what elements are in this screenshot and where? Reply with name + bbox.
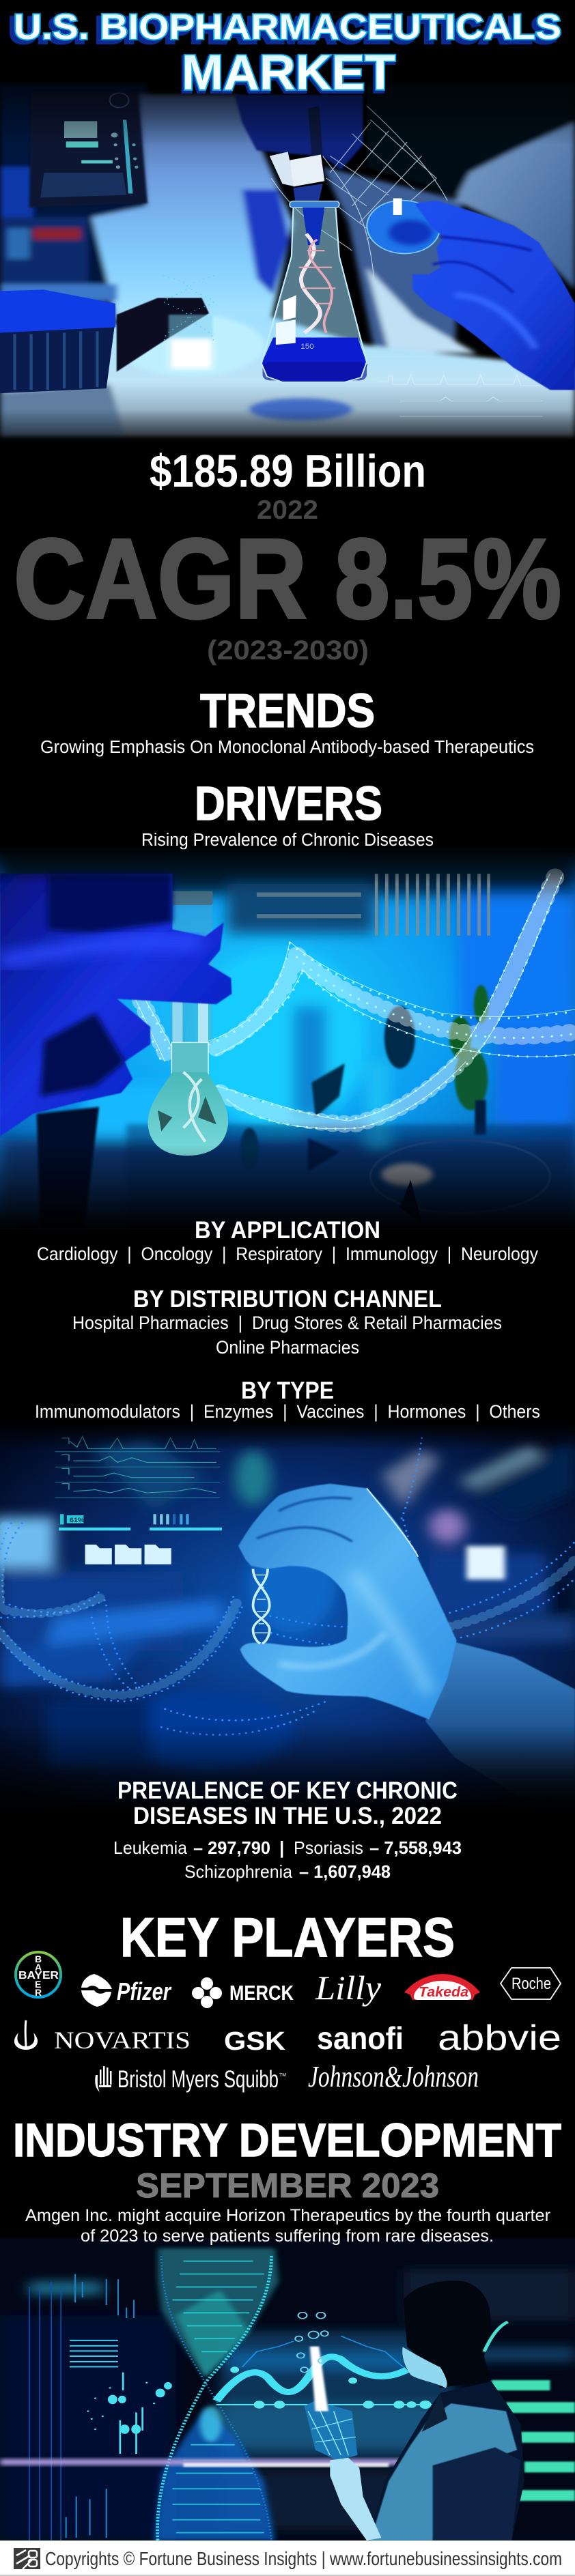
logo: takeda: Takeda [419,1985,468,2000]
hud people stats [59,1514,222,1530]
photo: gloved hand holding dna strand in lab [0,1422,575,1812]
heading: by distribution channel: BY DISTRIBUTION CHANNEL [133,1286,442,1313]
logo: johnson and johnson: Johnson&Johnson [308,2060,479,2093]
photo: gloved hand holding flask with molecular mesh [0,849,575,1229]
leukemia: – 297,790 [193,1837,270,1858]
logo: bristol myers squibb: Bristol Myers Squibb [117,2066,279,2093]
logo: sanofi: sanofi [317,2020,404,2056]
logo: pfizer: Pfizer [117,1977,172,2005]
ecg lines on table [378,375,543,416]
green data bars [492,2380,575,2501]
top fade [0,50,575,145]
photo: scientist with holographic dna [0,2238,575,2541]
blue gloved hand [412,201,575,390]
bottom fade [0,1145,575,1229]
logo: bayer: E [35,1979,41,1990]
logo: bristol myers squibb: TM [279,2073,286,2078]
prevalence figures [113,1837,462,1882]
leukemia: Leukemia [113,1837,188,1858]
title shadow [10,11,557,102]
lab coat sleeve [425,1642,575,1801]
hud dots [87,2373,172,2454]
development text: Amgen Inc. might acquire Horizon Therapeutics by the fourth quarter [25,2206,550,2225]
separator: | [279,1837,284,1858]
scientist silhouette [330,2280,524,2541]
beaker [126,1124,575,1229]
icon: fortune business insights logo [14,2548,40,2569]
flask graduation: 150 [300,343,314,351]
holographic hand [295,2313,358,2460]
flask bulb with dna [148,1042,228,1156]
development text: of 2023 to serve patients suffering from rare diseases. [81,2227,494,2246]
logo: bayer: A [35,1962,42,1973]
horizontal light streak [0,2459,404,2467]
hud people stats: 61% [70,1517,85,1524]
drivers text: Rising Prevalence of Chronic Diseases [141,831,434,850]
logo: roche: Roche [511,1975,551,1993]
trends text: Growing Emphasis On Monoclonal Antibody-based Therapeutics [40,738,534,757]
cagr period: (2023-2030) [207,635,369,666]
psoriasis: – 7,558,943 [369,1837,462,1858]
logo: roche [501,1968,561,1999]
top black band [0,0,575,51]
glass tube [169,891,212,1044]
flask with blue liquid [262,201,367,382]
logo: merck: MERCK [229,1981,294,2005]
development date: SEPTEMBER 2023 [136,2166,439,2205]
distribution list line 2: Online Pharmacies [216,1337,359,1358]
footer [0,2541,575,2576]
white glow screen [466,1546,505,1579]
logo: novartis [14,2020,191,2054]
schizophrenia: – 1,607,948 [299,1861,391,1882]
title [10,8,561,102]
schizophrenia [184,1861,391,1882]
left hud lines [29,2282,61,2541]
hud ticks [66,2274,134,2538]
logo: bayer: BAYER [18,1970,59,1981]
title shadow: U.S. BIOPHARMACEUTICALS [10,11,557,51]
hud charts [55,1437,220,1498]
mesh net [271,106,447,278]
folder icons [85,1545,171,1564]
logo: bristol myers squibb [95,2066,286,2093]
molecular mesh [136,874,575,1129]
title line 1: U.S. BIOPHARMACEUTICALS [14,8,561,47]
market size value: $185.89 Billion [150,446,426,497]
logo: bayer: B [35,1954,42,1964]
dna inside flask [299,234,335,333]
dark device on bench [117,298,209,372]
logo: takeda [404,1974,480,2000]
upper glove and pipette [235,95,363,202]
wave markers [230,2366,432,2409]
bottom fade [0,1724,575,1812]
application list: Cardiology | Oncology | Respiratory | Immunology | Neurology [37,1244,538,1264]
title line 2: MARKET [182,46,395,100]
psoriasis: Psoriasis [294,1837,363,1858]
logo: bayer: R [35,1987,42,1998]
distribution list line 1: Hospital Pharmacies | Drug Stores & Retail Pharmacies [72,1313,502,1333]
logo: bayer [16,1952,61,1998]
top fade [0,1422,575,1450]
logo: novartis: NOVARTIS [54,2027,191,2054]
type list: Immunomodulators | Enzymes | Vaccines | Hormones | Others [35,1401,540,1422]
hologram dna glow [163,276,214,369]
petri dish reflection [249,398,352,420]
heading: drivers: DRIVERS [195,777,382,830]
top fade [0,849,575,884]
logo: lilly: Lilly [315,1969,382,2007]
heading: by type: BY TYPE [241,1377,334,1404]
bottom fade [0,410,575,457]
tube rack [0,289,115,393]
gloved hand [238,1484,457,1719]
dna strand [253,1569,270,1644]
title shadow: MARKET [180,48,394,102]
market size year: 2022 [257,496,318,525]
heading: by application: BY APPLICATION [195,1217,380,1244]
heading: prevalence of chronic diseases: DISEASES IN THE U.S., 2022 [133,1803,442,1829]
display stripes [257,874,490,936]
heading: trends: TRENDS [200,684,375,737]
logo: gsk: GSK [224,2027,286,2056]
dark stand [37,1107,99,1229]
schizophrenia: Schizophrenia [184,1861,293,1882]
heading: key players: KEY PLAYERS [120,1907,455,1969]
logo: abbvie: abbvie [438,2018,561,2058]
leaves [240,985,488,1171]
logo: pfizer [81,1974,172,2007]
glowing wave chart [216,2336,433,2405]
development text [25,2206,550,2246]
heading: prevalence of chronic diseases [117,1777,458,1829]
psoriasis [294,1837,462,1858]
logo: merck [192,1977,294,2008]
heading: prevalence of chronic diseases: PREVALENCE OF KEY CHRONIC [117,1777,458,1804]
photo: laboratory flask and blue glove [0,83,575,440]
dna helix [154,2248,279,2541]
petri dish [357,192,450,261]
dotted mesh [0,1438,575,1735]
blue glove [0,874,232,1136]
leukemia [113,1837,270,1858]
hud bars block [70,2340,118,2367]
lab monitor [29,92,148,207]
